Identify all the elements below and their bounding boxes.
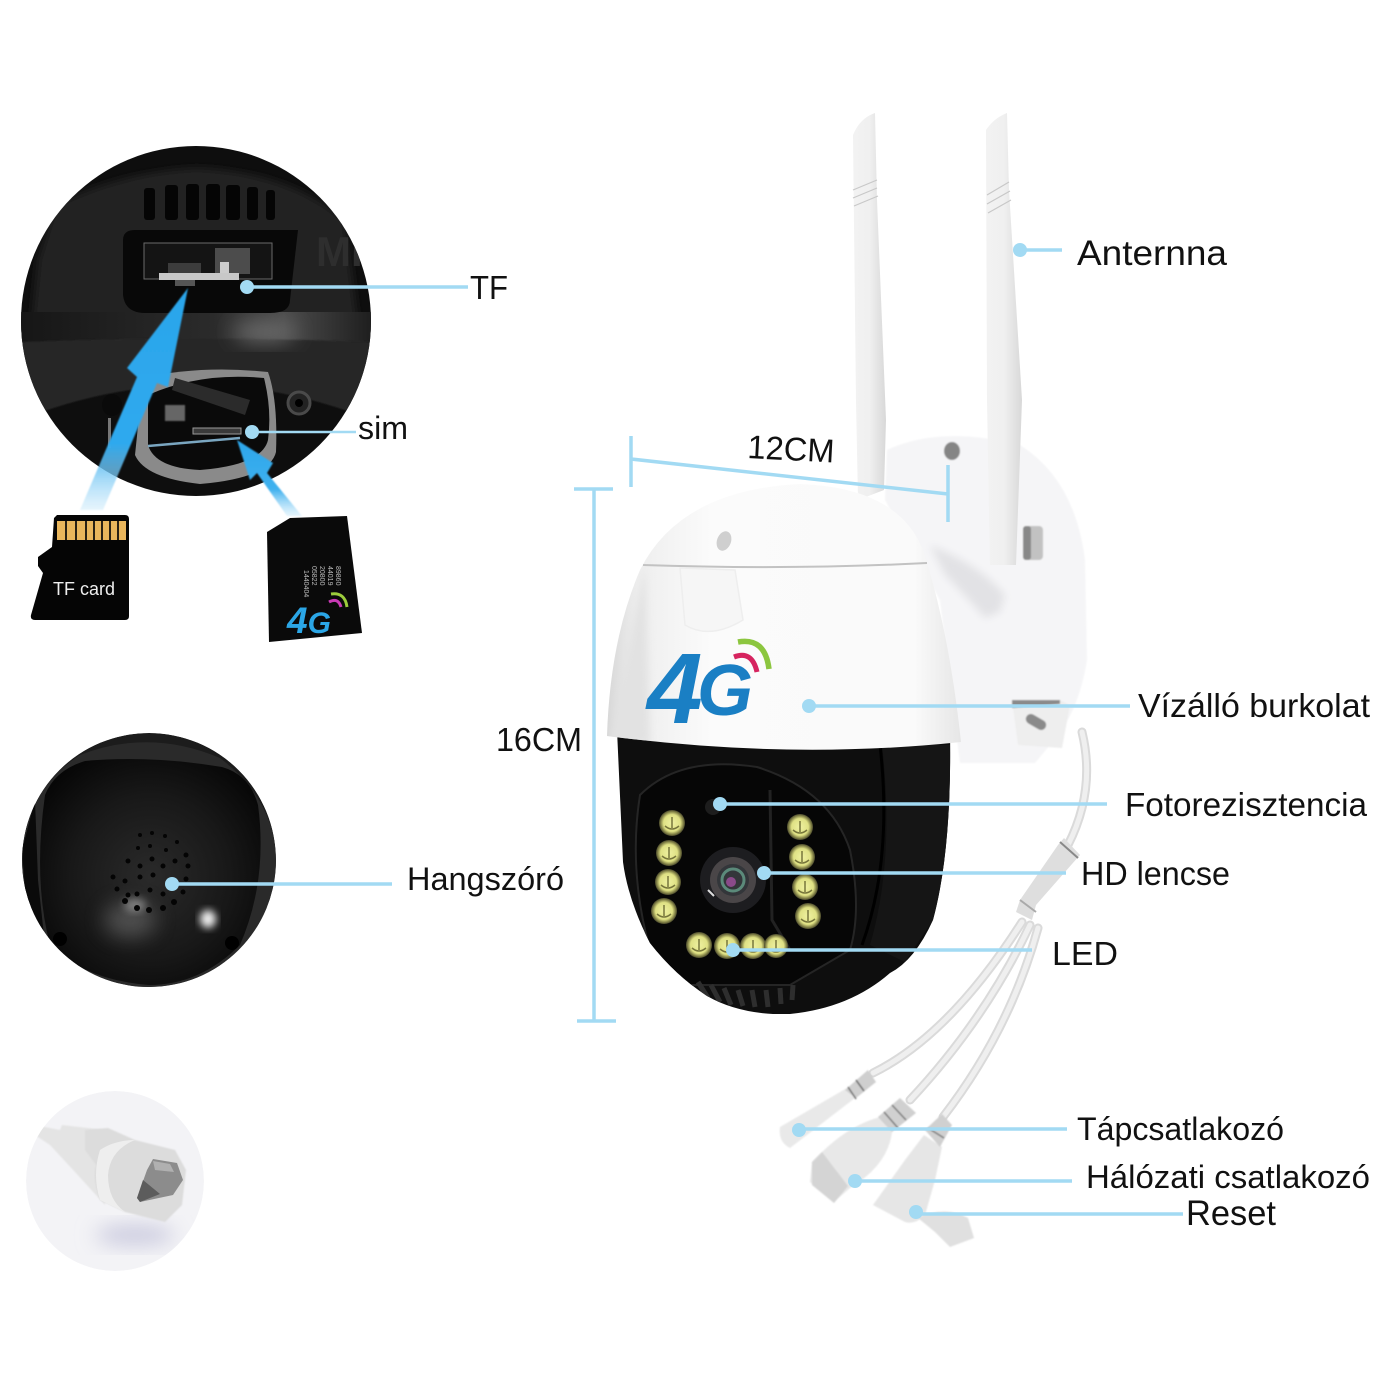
icon: reset connector bbox=[873, 1114, 974, 1247]
callout: TF bbox=[240, 269, 508, 306]
cables bbox=[873, 732, 1087, 1117]
icon: SIM card: 05822 bbox=[310, 566, 317, 586]
arrow: SIM card to slot bbox=[237, 440, 302, 516]
dimension: 12CM: 12CM bbox=[747, 428, 835, 470]
camera dome bbox=[607, 494, 961, 750]
LED centre marks bbox=[657, 817, 815, 952]
icon: SIM card: 89860 bbox=[334, 566, 341, 586]
icon: SIM card bbox=[267, 516, 362, 642]
icon: SIM card: 1440404 bbox=[302, 570, 309, 597]
4G logo: G bbox=[697, 651, 753, 731]
dimension: 16CM: 16CM bbox=[496, 721, 582, 758]
panel: speaker closeup bbox=[22, 733, 276, 990]
icon: power connector bbox=[780, 1070, 876, 1148]
callout: Tápcsatlakozó: Tápcsatlakozó bbox=[1077, 1111, 1284, 1147]
callout: Hangszóró: Hangszóró bbox=[407, 861, 564, 897]
vents bbox=[144, 184, 275, 220]
callout: Fotorezisztencia bbox=[713, 786, 1368, 823]
dimension: 12CM bbox=[631, 428, 948, 522]
icon: wall mount bracket bbox=[885, 436, 1087, 763]
callout: TF: TF bbox=[470, 269, 508, 306]
icon: cable splitter bbox=[1016, 838, 1080, 920]
TF slot recess bbox=[123, 230, 298, 313]
callout: LED bbox=[726, 935, 1118, 972]
icon: LED array bbox=[651, 810, 821, 959]
callout: Anternna bbox=[1013, 234, 1228, 273]
arrow: TF card to slot bbox=[80, 288, 188, 510]
speaker holes bbox=[110, 831, 190, 913]
callout: LED: LED bbox=[1052, 935, 1118, 972]
camera black body bbox=[610, 725, 955, 1020]
callout: sim: sim bbox=[358, 410, 408, 446]
callout: Hangszóró bbox=[165, 861, 564, 897]
panel: network port closeup bbox=[26, 1091, 204, 1271]
callout: HD lencse bbox=[757, 855, 1230, 892]
callout: Vízálló burkolat: Vízálló burkolat bbox=[1138, 687, 1370, 724]
dimension: 16CM bbox=[496, 489, 616, 1021]
4G logo: 4 bbox=[645, 633, 703, 745]
callout: Fotorezisztencia: Fotorezisztencia bbox=[1125, 786, 1368, 823]
icon: SIM card: 44019 bbox=[326, 566, 333, 586]
SIM slot recess bbox=[135, 370, 276, 484]
callout: Reset bbox=[909, 1194, 1276, 1233]
icon: SIM card: 4G bbox=[286, 600, 331, 641]
callout: Hálózati csatlakozó: Hálózati csatlakozó bbox=[1086, 1159, 1370, 1195]
callout: Vízálló burkolat bbox=[802, 687, 1370, 724]
panel: TF and SIM slot closeup bbox=[20, 146, 372, 498]
callout: Tápcsatlakozó bbox=[792, 1111, 1284, 1147]
icon: network connector bbox=[810, 1098, 916, 1203]
callout: Anternna: Anternna bbox=[1077, 234, 1228, 273]
panel: TF and SIM slot closeup: MI bbox=[316, 228, 363, 275]
icon: TF card bbox=[31, 515, 129, 620]
icon: lens bbox=[700, 847, 766, 913]
callout: sim bbox=[245, 410, 408, 446]
icon: TF card: TF card bbox=[53, 579, 115, 599]
icon: right antenna bbox=[986, 113, 1022, 565]
callout: Reset: Reset bbox=[1186, 1194, 1276, 1233]
4G logo bbox=[645, 633, 769, 745]
icon: left antenna bbox=[853, 113, 886, 500]
icon: SIM card: 20800 bbox=[318, 566, 325, 586]
callout: Hálózati csatlakozó bbox=[848, 1159, 1370, 1195]
callout: HD lencse: HD lencse bbox=[1081, 855, 1230, 892]
